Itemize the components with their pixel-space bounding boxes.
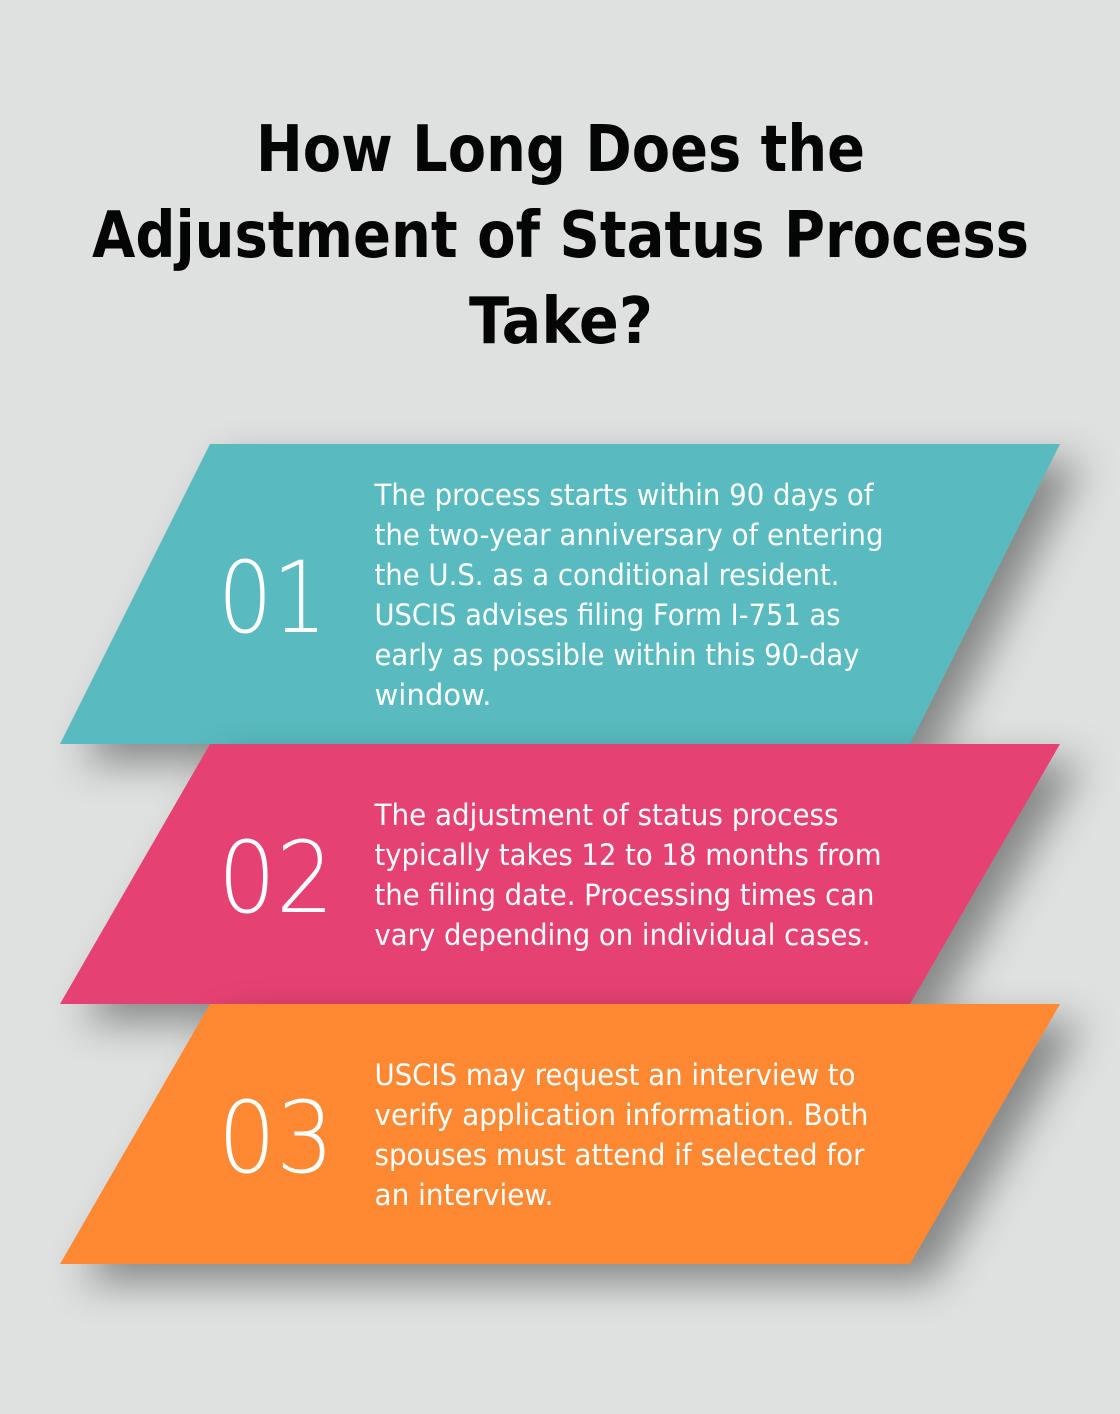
text: step 01: the U.S. as a conditional resident. bbox=[374, 558, 840, 592]
text: step 01: USCIS advises filing Form I-751 as bbox=[374, 598, 840, 632]
title bbox=[92, 113, 1029, 359]
pink parallelogram bbox=[60, 744, 1060, 1004]
text: step 01 bbox=[374, 478, 884, 712]
text: step 02: vary depending on individual cases. bbox=[374, 918, 870, 952]
text: step 03 bbox=[374, 1058, 868, 1212]
title: Take? bbox=[469, 285, 653, 359]
text: step 01: window. bbox=[374, 678, 492, 712]
text: step 01: The process starts within 90 days of bbox=[374, 478, 874, 512]
text: step 02: the filing date. Processing times can bbox=[374, 878, 874, 912]
text: step 01: the two-year anniversary of entering bbox=[374, 518, 884, 552]
teal parallelogram bbox=[60, 444, 1060, 744]
text: step 03: an interview. bbox=[374, 1178, 554, 1212]
panel: step 02 bbox=[60, 744, 1060, 1004]
panel: step 03 bbox=[60, 1004, 1060, 1264]
text: step 01: early as possible within this 90-day bbox=[374, 638, 860, 672]
text: step 03: USCIS may request an interview to bbox=[374, 1058, 856, 1092]
number 03: 03 bbox=[218, 1081, 334, 1196]
title: How Long Does the bbox=[256, 113, 865, 187]
text: step 03: spouses must attend if selected for bbox=[374, 1138, 865, 1172]
text: step 02: The adjustment of status process bbox=[374, 798, 838, 832]
text: step 02 bbox=[374, 798, 882, 952]
orange parallelogram bbox=[60, 1004, 1060, 1264]
text: step 03: verify application information. Both bbox=[374, 1098, 868, 1132]
panel: step 01 bbox=[60, 444, 1060, 744]
text: step 02: typically takes 12 to 18 months from bbox=[374, 838, 882, 872]
number 01: 01 bbox=[218, 541, 327, 656]
number 02: 02 bbox=[218, 821, 334, 936]
